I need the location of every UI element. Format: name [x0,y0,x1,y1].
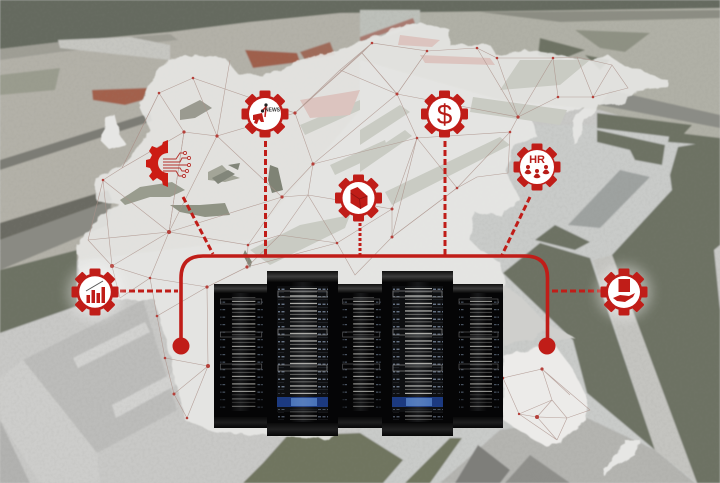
circuit traces [163,153,188,176]
bus endpoint left [172,338,190,354]
network mesh lines [88,43,628,440]
rack 4 [382,271,453,436]
Australia [503,345,586,446]
network nodes [102,42,594,419]
rack 1 [214,284,267,428]
top right roof and stripes [360,10,420,45]
bottom green [243,433,403,483]
dashed connector: right gear [552,290,601,292]
icon: finance gear: $ [437,99,453,130]
map landmass [77,22,668,440]
icon: circuit half gear [146,140,190,187]
icon: hand and briefcase gear [600,268,648,316]
rack 2 [267,271,338,436]
icon glow [68,265,651,319]
dashed connector: circuit gear [183,197,213,254]
bottom right lots [440,416,695,483]
icon: box gear [335,174,382,222]
bus endpoint right [538,338,556,354]
dashed connector: finance gear [444,141,446,256]
icon: HR gear: HR [529,154,545,166]
New Zealand [602,440,640,475]
right pad [360,125,720,483]
icon: news gear: NEWS [265,108,281,114]
UK [100,115,127,150]
icon: news gear [242,90,288,138]
icon: analytics gear [72,268,118,316]
dashed connector: news gear [264,141,267,256]
dashed connector: HR gear [502,197,530,255]
left building [23,300,177,453]
server racks [214,271,503,436]
rack 3 [337,284,384,428]
Indonesia islands [503,285,575,345]
seas and lakes [120,100,320,268]
icon: finance gear [421,90,468,138]
half gear [146,140,168,187]
main bus line [172,256,556,354]
icon: HR gear [514,144,560,190]
world map [77,22,668,475]
dashed connector: left gear [120,290,178,292]
rack 5 [453,284,503,428]
dotted connector: box gear [358,223,362,256]
photo showing through map [250,60,590,265]
